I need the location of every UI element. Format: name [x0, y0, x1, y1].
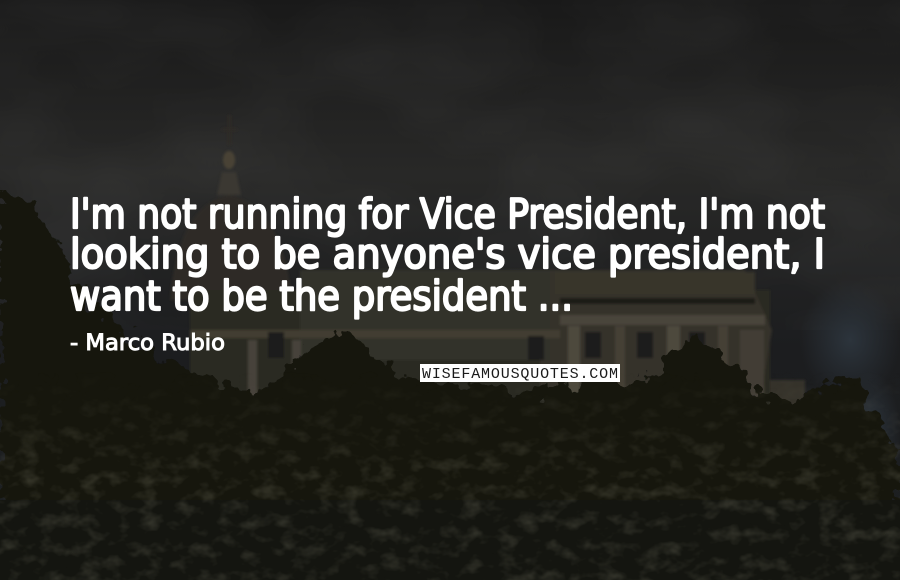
background: dark trees — [0, 190, 900, 580]
quote text — [70, 190, 825, 320]
watermark badge: WISEFAMOUSQUOTES.COM — [422, 366, 618, 383]
quote line 2: looking to be anyone's vice president, I — [70, 230, 825, 278]
background: palace building — [170, 115, 805, 450]
quote line 3: want to be the president ... — [70, 272, 573, 320]
author attribution: - Marco Rubio — [70, 331, 225, 356]
